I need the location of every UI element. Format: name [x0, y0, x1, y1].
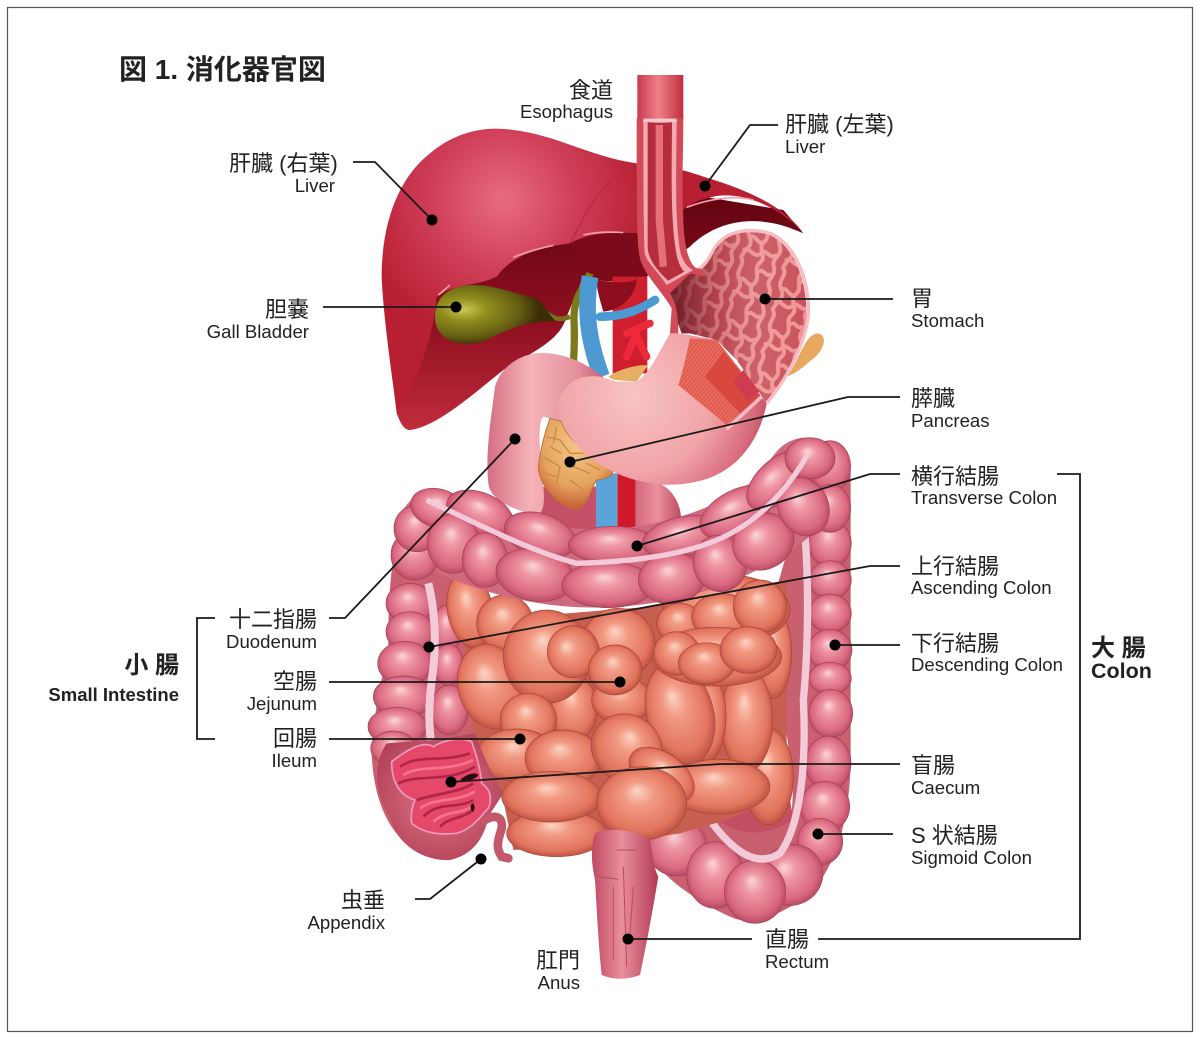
liver lobe fold	[570, 167, 633, 243]
label: liver left lobe: 肝臓 (左葉)	[785, 112, 894, 137]
label: jejunum: Jejunum	[247, 693, 317, 714]
label: transverse colon: 横行結腸	[911, 464, 999, 489]
spleen tail	[787, 333, 824, 377]
esophagus wall	[637, 118, 707, 333]
lower jejunum behind stomach	[633, 479, 681, 550]
label: ileum	[272, 726, 526, 771]
muscle fibre band	[705, 352, 760, 413]
label: liver left lobe: Liver	[785, 136, 825, 157]
label: pancreas	[564, 386, 990, 468]
vena cava lower	[596, 473, 617, 540]
label: rectum: 直腸	[765, 927, 809, 952]
label: pancreas: 膵臓	[911, 386, 955, 411]
label: liver right lobe	[229, 151, 438, 226]
rectum folds	[597, 850, 637, 967]
label: small intestine group: 小 腸	[124, 652, 179, 679]
transverse colon	[391, 438, 851, 608]
inner muscle patch	[733, 370, 759, 402]
label: transverse colon: Transverse Colon	[911, 487, 1057, 508]
label: small intestine group: Small Intestine	[48, 684, 179, 705]
ascending colon	[368, 583, 468, 766]
label: liver right lobe: Liver	[295, 175, 335, 196]
label: esophagus: 食道	[569, 78, 613, 103]
stomach rim	[695, 231, 808, 429]
transverse colon base band	[437, 477, 807, 568]
label: stomach: Stomach	[911, 310, 984, 331]
label: anus: 肛門	[536, 948, 580, 973]
ascending colon base	[372, 520, 487, 860]
small intestine loops	[441, 568, 793, 857]
esophagus pale layer	[643, 118, 693, 285]
illustration: upper digestive organs	[382, 75, 824, 550]
label: descending colon: Descending Colon	[911, 654, 1063, 675]
stomach mucosa	[667, 232, 807, 403]
caecum opening	[392, 739, 490, 834]
esophagus highlight	[659, 125, 663, 267]
liver fold over vessels	[597, 278, 637, 312]
label: descending colon	[830, 631, 1063, 675]
label: ascending colon: 上行結腸	[911, 554, 999, 579]
label: stomach: 胃	[911, 286, 933, 311]
gall bladder	[435, 285, 557, 344]
label: jejunum: 空腸	[273, 669, 317, 694]
label: ascending colon: Ascending Colon	[911, 577, 1052, 598]
label: descending colon: 下行結腸	[911, 631, 999, 656]
label: gall bladder	[207, 297, 462, 342]
label: caecum: 盲腸	[911, 753, 955, 778]
label: rectum	[622, 927, 829, 972]
label: anus: Anus	[538, 972, 580, 993]
label: colon group: 大 腸	[1091, 635, 1146, 662]
label: duodenum: Duodenum	[226, 631, 317, 652]
label: ileum: 回腸	[273, 726, 317, 751]
colon strip ascending	[428, 583, 435, 747]
label: duodenum	[226, 434, 520, 652]
aorta lower	[617, 473, 635, 540]
stomach body	[558, 333, 767, 485]
liver lobe lower mass	[570, 233, 647, 282]
rectum	[592, 830, 658, 979]
portal vein	[587, 277, 602, 377]
esophagus upper tube	[637, 75, 683, 120]
label: ascending colon	[424, 554, 1052, 652]
label: appendix: Appendix	[307, 912, 386, 933]
cystic duct	[537, 307, 570, 319]
pancreas lobule lines	[543, 427, 600, 490]
label: anus	[536, 948, 580, 993]
label: appendix: 虫垂	[341, 888, 385, 913]
esophagus opening	[643, 119, 677, 123]
stomach wall muscle	[678, 338, 760, 425]
liver edge highlights	[438, 198, 753, 295]
label: ileum: Ileum	[272, 750, 317, 771]
label: sigmoid colon: Sigmoid Colon	[911, 847, 1032, 868]
portal vein branch	[600, 300, 655, 317]
label: gall bladder: 胆嚢	[265, 297, 309, 322]
appendix	[485, 817, 508, 858]
bile duct	[573, 273, 590, 365]
label: pancreas: Pancreas	[911, 410, 990, 431]
label: caecum	[446, 753, 980, 798]
label: gall bladder: Gall Bladder	[207, 321, 309, 342]
label: stomach	[760, 286, 984, 331]
label: sigmoid colon: S 状結腸	[911, 823, 998, 848]
label: jejunum	[247, 669, 626, 714]
ileocecal openings	[460, 773, 478, 781]
inner descending column	[717, 600, 793, 833]
label: duodenum: 十二指腸	[229, 607, 317, 632]
label: liver left lobe	[700, 112, 894, 192]
label: appendix	[307, 854, 486, 933]
liver lit surface	[382, 129, 803, 413]
pancreas	[538, 418, 613, 509]
bracket: small intestine	[197, 618, 215, 739]
title: 図 1. 消化器官図	[119, 54, 326, 85]
label: sigmoid colon	[812, 823, 1032, 868]
label: caecum: Caecum	[911, 777, 980, 798]
label: liver right lobe: 肝臓 (右葉)	[229, 151, 338, 176]
colon strip transverse	[427, 453, 808, 563]
descending colon base	[650, 443, 851, 921]
small intestine base	[460, 580, 787, 850]
label: transverse colon	[632, 464, 1057, 552]
caecum fold highlights	[403, 760, 475, 822]
label: esophagus: Esophagus	[520, 101, 613, 122]
illustration: colon and lower intestine	[368, 438, 853, 979]
liver underside	[397, 197, 803, 430]
duodenum	[487, 353, 610, 515]
label: small intestine group	[48, 652, 179, 705]
caecum folds	[398, 753, 475, 827]
label: colon group: Colon	[1091, 659, 1152, 683]
descending colon	[647, 519, 853, 923]
aorta upper	[613, 277, 647, 373]
caecum outer	[377, 733, 503, 860]
duodenum lower loop	[537, 487, 603, 540]
bracket: colon	[818, 474, 1080, 939]
esophagus lumen	[648, 122, 684, 281]
vessel branches	[627, 323, 650, 357]
label: esophagus	[520, 78, 613, 122]
label: colon group	[1091, 635, 1152, 683]
stomach mucosa shading	[670, 232, 782, 402]
pancreas upper piece	[608, 365, 648, 382]
colon strip descending	[710, 533, 808, 859]
label: rectum: Rectum	[765, 951, 829, 972]
